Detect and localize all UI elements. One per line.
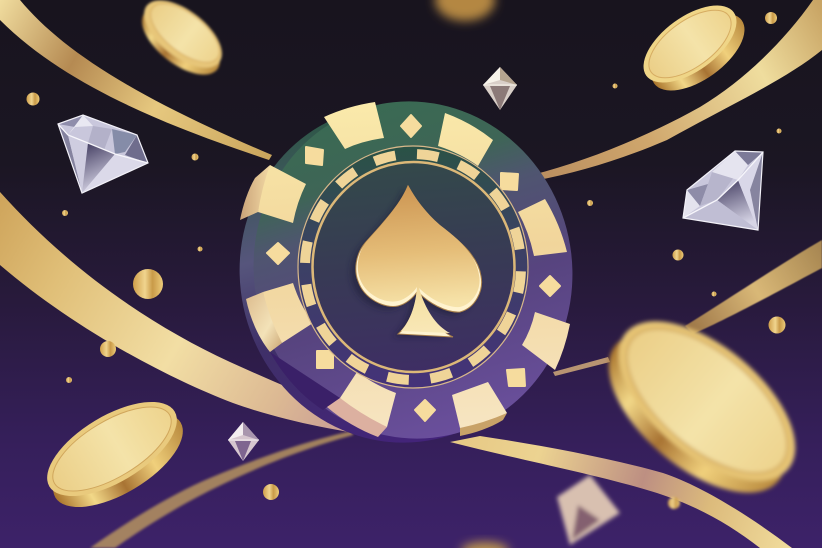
chip	[208, 72, 604, 473]
diamond: bottom blurred	[557, 475, 620, 545]
ribbon: top left	[0, 0, 272, 160]
chip side	[208, 75, 592, 473]
chip diamonds	[267, 115, 560, 421]
ribbon: lower right tail	[450, 436, 792, 548]
coin edge	[38, 394, 198, 526]
chip side: cream bottom right	[460, 413, 507, 436]
diamond: left	[58, 115, 148, 193]
icon: spade	[358, 185, 480, 333]
coin edge	[581, 303, 813, 523]
diamond: top small	[483, 67, 517, 110]
coin face	[591, 291, 822, 511]
coin face	[133, 0, 233, 80]
coin: large right blurred	[581, 291, 822, 523]
chip face	[222, 72, 604, 468]
chip side: cream upper left	[240, 165, 270, 220]
ribbon: right	[685, 240, 822, 334]
coin edge	[131, 0, 231, 87]
ribbon: large left	[0, 192, 385, 437]
coin face	[630, 0, 750, 98]
chip side: cream bottom left	[327, 398, 387, 437]
chip center	[312, 162, 514, 372]
coin: bottom left	[32, 383, 198, 526]
chip side: lower shadow	[270, 352, 340, 410]
icon: spade shadow	[351, 190, 477, 337]
diamond: right	[683, 151, 763, 230]
chip ring dashes	[305, 154, 521, 380]
coin: top right	[630, 0, 758, 106]
coin: top	[131, 0, 233, 87]
coin face	[32, 383, 192, 515]
coin: top blurred	[435, 0, 495, 21]
coin: bottom blurred	[461, 542, 509, 548]
coin edge	[638, 0, 758, 106]
ribbon: bottom faint	[90, 431, 353, 548]
chip side: cream left	[246, 292, 282, 352]
ribbon: lower right stub	[553, 357, 610, 376]
chip inner band	[298, 146, 528, 388]
chip cream blocks	[258, 102, 570, 428]
icon: spade rim	[356, 186, 482, 337]
diamond: bottom small	[228, 422, 259, 461]
ribbon: top right	[532, 0, 822, 181]
